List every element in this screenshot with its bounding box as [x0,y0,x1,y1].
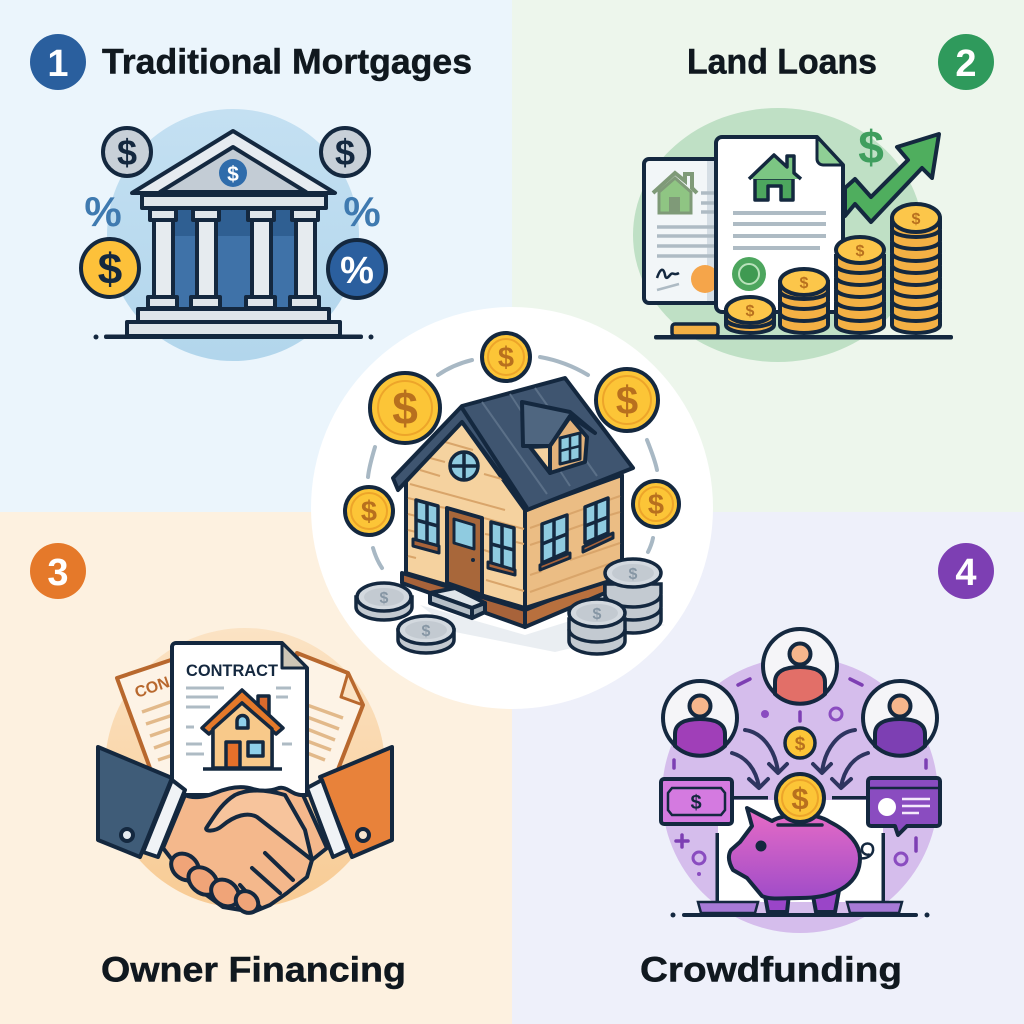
windows [416,498,608,572]
silver coin right: $ [335,132,355,173]
center circle [311,307,713,709]
heading: Owner Financing: Owner Financing [101,950,406,990]
banknote: $ [690,792,702,814]
contract title: CONTRACT [186,662,278,680]
number badge 1 [30,34,86,90]
piggy bank [729,808,873,912]
icon: land loan documents and rising coins [633,108,953,362]
panel: owner financing background [0,512,512,1024]
icon: owner financing handshake and contract [98,628,392,917]
screen area [718,800,883,902]
silver coin lower [398,616,454,653]
coin stack 2: $ [800,275,809,292]
coin stack 2 [780,269,828,333]
gold coin [81,239,139,297]
heading: Land Loans: Land Loans [687,42,877,82]
right sleeve [307,747,392,857]
dormer [522,402,595,473]
panel: traditional mortgages background [0,0,512,512]
heading: Crowdfunding: Crowdfunding [640,950,902,990]
silver coin stack front: $ [593,606,602,623]
silver coin left [103,128,151,176]
gold coin: $ [98,245,122,294]
pediment coin: $ [227,163,239,186]
foundation [402,573,605,627]
clasped hands [163,787,327,917]
back contract sheets [117,653,363,790]
walls [406,422,622,608]
small coin [785,728,815,758]
number badge 3: 3 [47,552,69,594]
percent right: % [343,188,381,235]
back document [644,159,728,303]
dollar signs: $ [498,342,514,374]
coin stack 3: $ [856,243,865,260]
blue percent coin: % [340,250,374,292]
bank building [127,131,340,336]
large coin: $ [791,781,809,816]
dashed ring [368,357,657,568]
ground line [654,335,953,340]
roof [393,378,633,510]
silver coin lower: $ [422,623,431,640]
silver coin left: $ [380,590,389,607]
small coin: $ [795,734,806,755]
silver coin stack back right [605,559,661,633]
number badge 4 [938,543,994,599]
browser window callout [868,778,940,835]
silver coin left: $ [117,132,137,173]
back contract sheets: CON [133,674,172,702]
dollar signs [361,342,664,528]
house shadow [420,605,665,652]
dollar signs: $ [616,379,638,423]
number badge 3 [30,543,86,599]
icon: crowdfunding piggy bank [661,629,940,933]
panel: land loans background [512,0,1024,512]
rising arrow [845,134,939,222]
dollar signs: $ [648,489,664,521]
front contract [172,643,307,795]
number badge 1: 1 [47,43,69,85]
coin stack 4: $ [912,211,921,228]
door [447,508,482,595]
icon: bank with coins [81,109,386,361]
dollar signs: $ [392,382,418,434]
arrows toward piggy bank [732,730,868,788]
dollar signs: $ [361,496,377,528]
silver coin left [356,583,412,620]
large coin [776,774,824,822]
gold coins [345,333,679,535]
icon: central house with coins [345,333,679,654]
flat coin [672,324,718,336]
dashes and sparkles [674,679,926,851]
coin stack 4 [892,204,940,333]
ground line [94,334,374,340]
panel: crowdfunding background [512,512,1024,1024]
laptop supports and trays [670,796,930,918]
person left [663,681,737,756]
silver coin stack front [569,599,625,654]
green dollar sign: $ [858,121,884,173]
number badge 2: 2 [955,43,977,85]
window sills [413,533,613,575]
number badge 2 [938,34,994,90]
person top [763,629,837,704]
silver coin right [321,128,369,176]
number badge 4: 4 [955,552,977,594]
front document [716,137,843,312]
person right [863,681,937,756]
doorstep [430,588,485,618]
heading: Traditional Mortgages: Traditional Mortgages [102,42,472,82]
coin stack 3 [836,237,884,333]
blue percent coin [328,240,386,298]
coin stack 1: $ [746,303,755,320]
pediment coin [219,159,247,187]
banknote [661,779,732,824]
siding lines [408,442,620,592]
round window [450,452,478,480]
contract house [202,690,283,769]
coin stack 1 [726,297,774,333]
silver coin stack back right: $ [629,566,638,583]
percent left: % [84,188,122,235]
left sleeve [98,747,185,857]
